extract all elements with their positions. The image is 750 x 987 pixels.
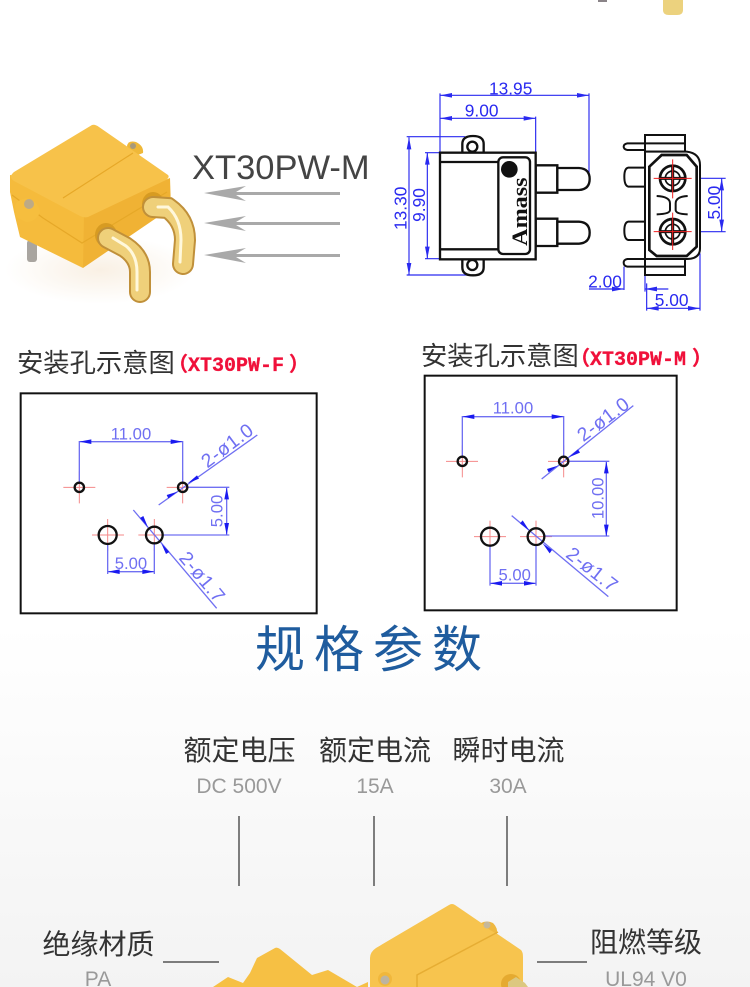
dimension drawing: XT30PW-M: 13.30	[390, 187, 410, 230]
spec: peak current	[452, 735, 565, 798]
arrow 1	[204, 186, 340, 201]
photo: XT30PW-M connector	[5, 125, 195, 304]
spec: rated current	[319, 735, 431, 798]
dimension drawing: XT30PW-M	[390, 78, 726, 311]
panel: hole diagram M: 2-ø1.0	[574, 394, 634, 446]
panel: hole diagram M: 2-ø1.7	[562, 544, 622, 597]
front ridge	[417, 932, 498, 987]
section title: specifications: 规格参数	[255, 622, 491, 678]
body top face	[11, 125, 169, 217]
spec: peak current: 30A	[489, 775, 527, 798]
dimension drawing: XT30PW-M: 9.00	[465, 100, 499, 120]
spec: rated current: 15A	[356, 775, 394, 798]
panel: hole diagram F: 2-ø1.0	[198, 420, 258, 473]
body left face	[10, 175, 92, 268]
hole labels: 11.00	[493, 399, 533, 418]
ear	[481, 922, 497, 934]
seam	[12, 153, 167, 243]
dimension drawing: XT30PW-M: 2.00	[588, 272, 622, 292]
spec: insulation material: 绝缘材质	[42, 929, 155, 960]
arrow 2	[204, 216, 340, 231]
holes	[458, 457, 568, 546]
hole labels: 11.00	[111, 424, 151, 443]
side view	[440, 136, 590, 275]
heading: mounting holes XT30PW-F: 安装孔示意图	[17, 348, 175, 378]
dimension drawing: XT30PW-M: 5.00	[655, 290, 689, 310]
spec: flame rating: 阻燃等级	[590, 927, 702, 958]
label: XT30PW-M: XT30PW-M	[192, 149, 370, 187]
body right face	[83, 178, 171, 268]
mount hole	[378, 972, 392, 986]
holes	[75, 483, 187, 544]
panel: hole diagram M: 10.00	[588, 477, 607, 519]
heading tag: XT30PW-M: （XT30PW-M ）	[570, 347, 712, 372]
heading tag: XT30PW-F: （XT30PW-F）	[168, 353, 309, 378]
rear ear	[127, 142, 143, 158]
spec: rated voltage	[183, 735, 296, 798]
gradient background: lower section	[0, 625, 750, 987]
panel: hole diagram M: 5.00	[498, 566, 531, 585]
panel: hole diagram F	[21, 393, 317, 613]
socket rims	[95, 223, 117, 247]
dimension lines	[79, 435, 257, 608]
panel: hole diagram M	[425, 376, 677, 610]
front view	[624, 135, 700, 275]
top photo remnant: connector pin tips	[505, 0, 750, 34]
side ear	[15, 198, 40, 222]
dim text: 13.95	[489, 78, 532, 98]
dimension drawing: XT30PW-M: Amass	[507, 177, 532, 246]
dimensions	[407, 93, 726, 311]
arrow 3	[204, 248, 340, 263]
spec: rated voltage: DC 500V	[196, 775, 282, 798]
spec: insulation material	[42, 929, 155, 987]
spec: rated voltage: 额定电压	[183, 735, 296, 766]
dimension drawing: XT30PW-M: 9.90	[409, 188, 429, 222]
left connector	[213, 948, 357, 987]
panel: hole diagram F: 5.00	[208, 495, 227, 527]
socket and pin	[501, 974, 521, 987]
center lines	[63, 471, 199, 551]
spec: peak current: 瞬时电流	[452, 735, 565, 766]
spec: flame rating	[590, 927, 702, 987]
mounting pin	[27, 240, 37, 262]
dimension drawing: XT30PW-M: 5.00	[704, 186, 724, 220]
spec: rated current: 额定电流	[319, 735, 431, 766]
gold pin far	[153, 207, 185, 264]
panel: hole diagram F: 5.00	[115, 554, 147, 573]
leader lines	[163, 816, 587, 962]
gold pin near	[108, 238, 140, 292]
photo: connector pair	[213, 904, 528, 987]
panel: hole diagram F: 2-ø1.7	[174, 548, 229, 607]
heading: mounting holes XT30PW-M: 安装孔示意图	[421, 341, 579, 371]
arrows pointing to connector	[204, 186, 340, 263]
right connector	[370, 904, 523, 987]
